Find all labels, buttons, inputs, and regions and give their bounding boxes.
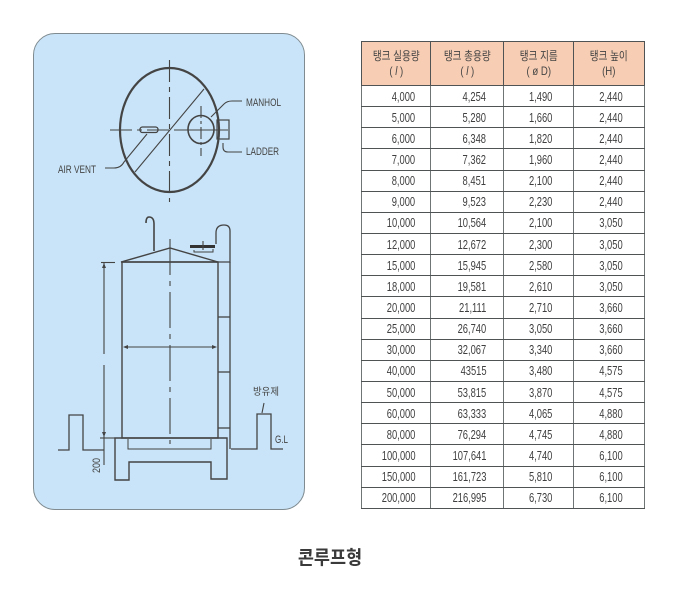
- table rows: 21,111: [459, 300, 486, 315]
- table rows: 2,230: [529, 194, 553, 209]
- table rows: 2,100: [529, 173, 553, 188]
- table rows: 6,348: [463, 131, 486, 146]
- table rows: 1,490: [529, 89, 553, 104]
- table rows: 25,000: [387, 321, 416, 336]
- table rows: 2,440: [600, 89, 623, 104]
- label: ladder: LADDER: [246, 146, 279, 158]
- table rows: 150,000: [382, 469, 416, 484]
- table rows: 4,575: [600, 385, 623, 400]
- table rows: 63,333: [458, 406, 486, 421]
- table rows: 4,880: [600, 406, 623, 421]
- table rows: 107,641: [453, 448, 486, 463]
- left dike and ground line: [58, 415, 104, 450]
- table rows: 9,000: [392, 194, 416, 209]
- table rows: 3,340: [529, 342, 553, 357]
- table rows: 3,660: [600, 342, 623, 357]
- table rows: 2,610: [529, 279, 553, 294]
- table rows: 161,723: [453, 469, 486, 484]
- table rows: 3,660: [600, 300, 623, 315]
- table rows: 20,000: [387, 300, 416, 315]
- icon: ladder side: [216, 225, 230, 449]
- table rows: 1,960: [529, 152, 553, 167]
- table rows: 50,000: [387, 385, 416, 400]
- table rows: 4,575: [600, 363, 623, 378]
- table rows: 5,280: [463, 110, 486, 125]
- table rows: 32,067: [458, 342, 486, 357]
- table rows: 53,815: [458, 385, 486, 400]
- label: ground level: G.L: [275, 434, 288, 446]
- icon: roof manhole: [190, 241, 215, 252]
- table rows: 200,000: [382, 490, 416, 505]
- table rows: 3,050: [600, 258, 623, 273]
- table rows: 12,672: [458, 237, 486, 252]
- label: manhole: MANHOL: [246, 97, 281, 109]
- table rows: 8,451: [463, 173, 486, 188]
- icon: vent pipe: [146, 217, 154, 251]
- table rows: 2,440: [600, 173, 623, 188]
- table header: ( l ): [460, 64, 474, 78]
- table rows: 2,440: [600, 131, 623, 146]
- table rows: 60,000: [387, 406, 416, 421]
- table rows: 3,050: [529, 321, 553, 336]
- table rows: 19,581: [458, 279, 486, 294]
- table rows: 6,100: [600, 469, 623, 484]
- table rows: 2,440: [600, 194, 623, 209]
- table rows: 18,000: [387, 279, 416, 294]
- table rows: 3,480: [529, 363, 553, 378]
- table header: 탱크 총용량: [444, 48, 490, 62]
- elevation view: tank body and roof: [121, 239, 218, 444]
- table rows: 4,740: [529, 448, 553, 463]
- table rows: 2,440: [600, 110, 623, 125]
- dimension: diameter: [123, 345, 217, 349]
- table rows: 7,000: [392, 152, 416, 167]
- table rows: 4,745: [529, 427, 553, 442]
- table rows: 2,300: [529, 237, 553, 252]
- right dike and ground line: [231, 414, 283, 449]
- table rows: 12,000: [387, 237, 416, 252]
- icon: manhole: [178, 101, 242, 156]
- table rows: 15,000: [387, 258, 416, 273]
- table rows: 10,564: [458, 215, 486, 230]
- table rows: 4,254: [463, 89, 486, 104]
- table rows: 6,100: [600, 490, 623, 505]
- table rows: 76,294: [458, 427, 486, 442]
- table rows: [382, 89, 623, 505]
- table rows: 1,660: [529, 110, 553, 125]
- table header: 탱크 지름: [520, 48, 558, 62]
- foundation inner grade lines: [128, 439, 211, 449]
- caption: 콘루프형: [298, 548, 362, 569]
- table rows: 6,100: [600, 448, 623, 463]
- table rows: 2,100: [529, 215, 553, 230]
- table rows: 9,523: [463, 194, 486, 209]
- icon: air vent: [105, 127, 158, 168]
- table rows: 2,440: [600, 152, 623, 167]
- table rows: 6,000: [392, 131, 416, 146]
- table rows: 3,050: [600, 237, 623, 252]
- label: air vent: AIR VENT: [58, 164, 96, 176]
- table rows: 216,995: [453, 490, 486, 505]
- table rows: 26,740: [458, 321, 486, 336]
- table rows: 100,000: [382, 448, 416, 463]
- dimension: height: [100, 262, 115, 465]
- table rows: 3,660: [600, 321, 623, 336]
- table rows: 6,730: [529, 490, 553, 505]
- table header: ( l ): [389, 64, 403, 78]
- table rows: 3,050: [600, 215, 623, 230]
- table header: 탱크 실용량: [373, 48, 419, 62]
- panel: tank diagram background: [33, 33, 305, 510]
- table rows: 43515: [460, 363, 486, 378]
- table rows: 30,000: [387, 342, 416, 357]
- table rows: 15,945: [458, 258, 486, 273]
- table rows: 3,050: [600, 279, 623, 294]
- table rows: 10,000: [387, 215, 416, 230]
- table header: (H): [602, 64, 616, 78]
- table rows: 7,362: [463, 152, 486, 167]
- table rows: 80,000: [387, 427, 416, 442]
- table rows: 2,710: [529, 300, 553, 315]
- table header: 탱크 높이: [590, 48, 628, 62]
- table header: ( ø D): [526, 64, 551, 78]
- table rows: 5,000: [392, 110, 416, 125]
- label: 200: 200: [91, 458, 103, 473]
- table rows: 1,820: [529, 131, 553, 146]
- table rows: 4,000: [392, 89, 416, 104]
- label: dike: 방유제: [253, 386, 279, 398]
- table rows: 8,000: [392, 173, 416, 188]
- leader: dike: [262, 403, 264, 413]
- table rows: 3,870: [529, 385, 553, 400]
- table rows: 40,000: [387, 363, 416, 378]
- foundation: [115, 438, 227, 480]
- table: tank specifications: [361, 41, 645, 509]
- table rows: 4,065: [529, 406, 553, 421]
- icon: ladder: [217, 120, 242, 152]
- plan view: tank top: [110, 60, 228, 202]
- table header: [362, 42, 644, 85]
- table rows: 5,810: [529, 469, 553, 484]
- table rows: 2,580: [529, 258, 553, 273]
- table rows: 4,880: [600, 427, 623, 442]
